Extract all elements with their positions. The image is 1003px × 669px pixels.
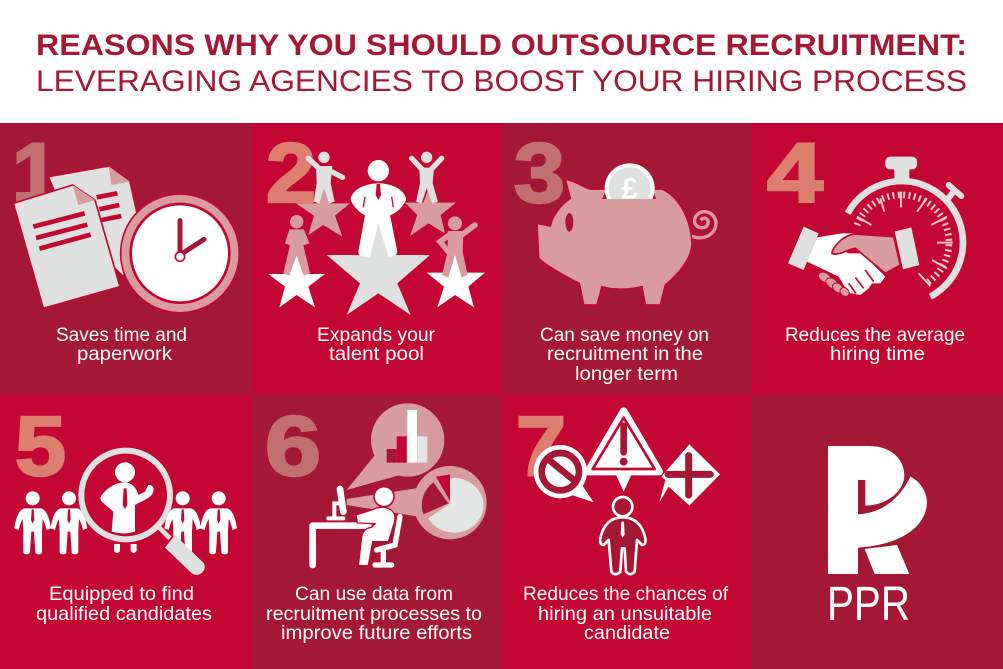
label (785, 324, 965, 365)
label: improve future efforts (281, 622, 472, 644)
label: Equipped to find (49, 583, 194, 605)
icon: people on stars (268, 152, 485, 315)
number 5: 5 (15, 399, 66, 493)
title: REASONS WHY YOU SHOULD OUTSOURCE RECRUITMENT: (36, 29, 967, 62)
number 1: 1 (12, 126, 59, 220)
number 3: 3 (514, 126, 565, 220)
label: Reduces the average (785, 324, 965, 346)
label: recruitment in the (547, 343, 703, 365)
label: Can save money on (540, 324, 709, 346)
panel 4: reduces hiring time (752, 123, 1003, 395)
number 4: 4 (767, 126, 823, 220)
label (56, 324, 187, 365)
icon: piggy bank with pound coin (537, 163, 716, 305)
label: hiring an unsuitable (538, 603, 712, 625)
icon: people under magnifying glass (14, 451, 237, 575)
label: Reduces the chances of (523, 583, 729, 605)
number 6: 6 (265, 399, 321, 493)
logo wordmark: PPR (827, 578, 910, 631)
icon: warning signs above a person (534, 411, 720, 574)
label: longer term (575, 363, 678, 385)
icon: stopwatch and handshake (788, 157, 963, 298)
panel 5: qualified candidates (0, 395, 252, 669)
label (523, 583, 729, 644)
panel 6: data from recruitment processes (252, 395, 502, 669)
label (266, 583, 482, 644)
label (540, 324, 709, 385)
panel 7: unsuitable candidate (502, 395, 752, 669)
title: LEVERAGING AGENCIES TO BOOST YOUR HIRING PROCESS (36, 65, 967, 98)
label: paperwork (77, 343, 172, 365)
label: talent pool (329, 343, 424, 365)
icon: piggy bank with pound coin: £ (621, 173, 638, 206)
label: Expands your (317, 324, 435, 346)
label: candidate (584, 622, 670, 644)
label: recruitment processes to (266, 603, 482, 625)
label: Can use data from (295, 583, 453, 605)
label: hiring time (830, 343, 925, 365)
label (36, 583, 212, 625)
panel 8: PPR logo (752, 395, 1003, 669)
panel 3: can save money (502, 123, 752, 395)
icon: person at desk with chart bubbles (313, 403, 487, 566)
icon: documents and clock (13, 166, 239, 313)
panel 2: expands your talent pool (252, 123, 502, 395)
number 2: 2 (266, 126, 316, 220)
logo mark (828, 446, 927, 574)
title (36, 29, 967, 98)
number 7: 7 (516, 399, 566, 493)
panel 1: saves time and paperwork (0, 123, 252, 395)
label: Saves time and (56, 324, 187, 346)
label: qualified candidates (36, 603, 212, 625)
label (317, 324, 435, 365)
